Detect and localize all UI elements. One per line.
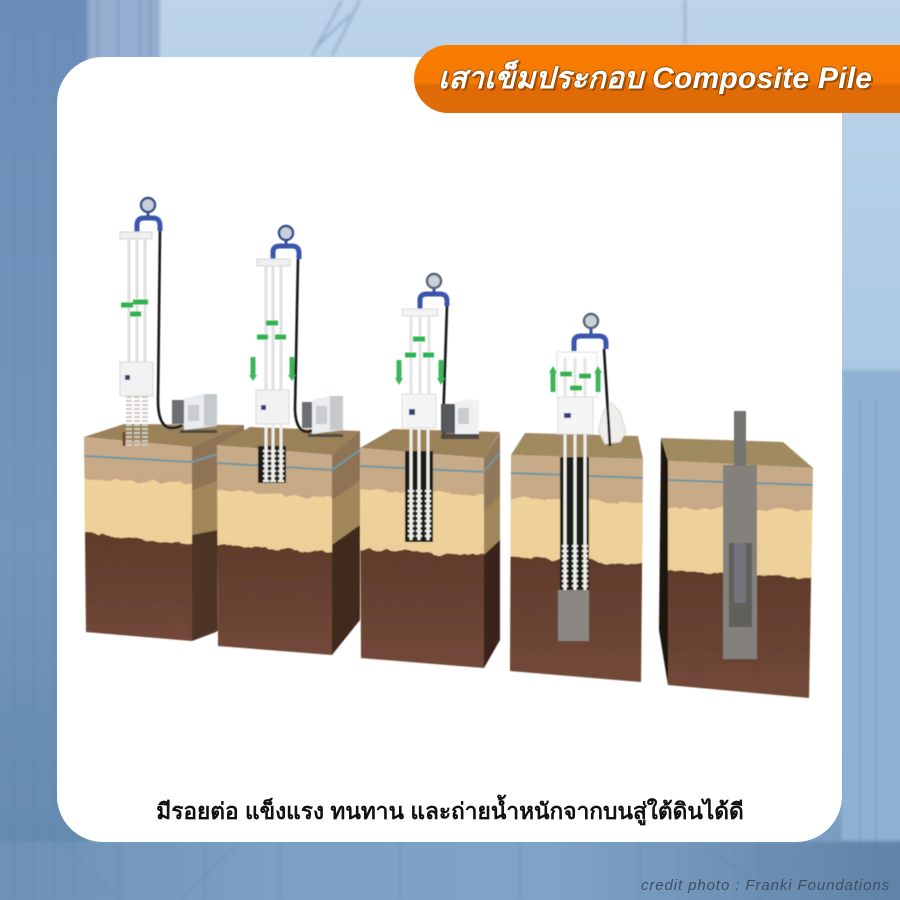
title banner bbox=[414, 45, 900, 113]
soil block 5 bbox=[650, 438, 820, 710]
photo credit: credit photo : Franki Foundations bbox=[641, 877, 890, 894]
soil block 1 bbox=[83, 423, 245, 642]
white pump bbox=[598, 403, 626, 444]
hydraulic hose bbox=[295, 259, 316, 432]
caption: มีรอยต่อ แข็งแรง ทนทาน และถ่ายน้ำหนักจากบนสู่ใต้ดินได้ดี bbox=[156, 798, 744, 824]
jacking rig bbox=[120, 232, 153, 446]
title text: เสาเข็มประกอบ Composite Pile bbox=[438, 62, 872, 95]
green wedges and down arrows bbox=[249, 323, 296, 381]
icon: pressure gauge and blue pipe bbox=[420, 274, 447, 309]
concrete pile bbox=[723, 411, 757, 659]
pile hole with rods and grout bbox=[558, 434, 589, 641]
hydraulic pump bbox=[302, 396, 343, 437]
hydraulic pump bbox=[172, 394, 217, 433]
jacking rig bbox=[557, 352, 597, 434]
icon: pressure gauge and blue pipe bbox=[574, 314, 606, 351]
hydraulic hose bbox=[443, 306, 448, 437]
step 2: rig jacking piles into soil bbox=[216, 224, 361, 656]
illustration: five composite pile installation steps bbox=[83, 196, 814, 699]
step 5: finished composite pile bbox=[650, 411, 820, 710]
pile hole with rods bbox=[405, 428, 433, 542]
soil block 4 bbox=[495, 433, 650, 690]
step 4: rods withdrawn, grout poured bbox=[495, 314, 650, 690]
step 1: soil block with rig above ground bbox=[83, 196, 245, 642]
pile hole with rods bbox=[258, 424, 286, 483]
hydraulic hose bbox=[604, 349, 610, 446]
green wedges and down arrows bbox=[395, 339, 445, 385]
icon: pressure gauge and blue pipe bbox=[273, 226, 299, 259]
hydraulic hose bbox=[158, 231, 182, 428]
soil block 3 bbox=[359, 428, 502, 669]
jacking rig bbox=[256, 259, 290, 424]
soil block 2 bbox=[216, 426, 361, 656]
icon: pressure gauge and blue pipe bbox=[137, 198, 160, 232]
hydraulic pump bbox=[441, 399, 479, 439]
white content panel bbox=[57, 57, 842, 842]
jacking rig bbox=[402, 309, 438, 428]
green wedges bbox=[121, 302, 148, 314]
step 3: piles driven deeper bbox=[345, 274, 500, 680]
green wedges and up arrows bbox=[549, 366, 602, 392]
